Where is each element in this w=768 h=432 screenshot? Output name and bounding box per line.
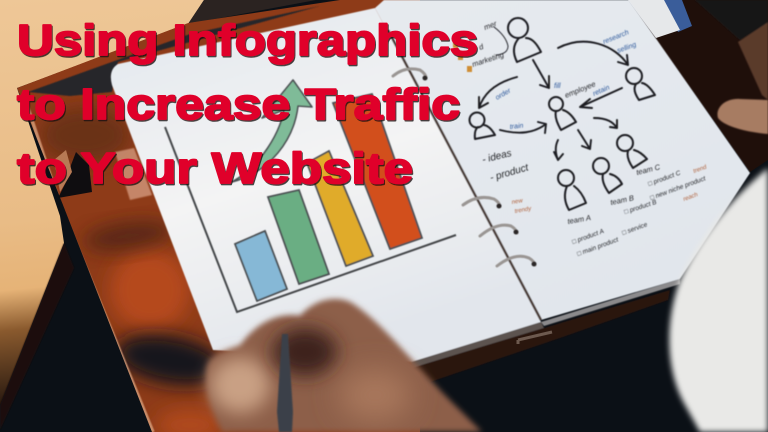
stitching edge of the leather: [24, 96, 153, 432]
person: team C: [617, 135, 647, 168]
white paper tab top right: [628, 0, 680, 38]
handwritten notes: employee: [563, 79, 597, 100]
handwritten notes: marketing: [471, 50, 506, 69]
green growth arrow: [232, 80, 312, 182]
binder spine: [388, 30, 541, 320]
person: team A: [558, 170, 586, 210]
folder lower edge: [412, 290, 670, 382]
blurred white sleeve: [669, 168, 768, 432]
binder rings: [393, 69, 536, 266]
wooden table: [0, 0, 204, 405]
green bar: [268, 190, 329, 284]
right side dark leather: [628, 0, 768, 172]
bright leather patch: [110, 250, 190, 330]
org chart sketch: [453, 18, 708, 258]
handwritten notes: reach: [683, 192, 699, 203]
person: employee: [549, 97, 576, 130]
handwritten notes: research: [602, 29, 630, 46]
title: [17, 16, 478, 193]
handwritten notes: □ main product: [576, 236, 621, 258]
table shadow strip: [0, 243, 74, 430]
leather tab notch: [58, 152, 92, 198]
pages of the open binder: [111, 0, 750, 382]
person: team B: [593, 158, 622, 193]
blue notebook tab: [662, 0, 692, 32]
handwritten notes: □ service: [621, 221, 649, 237]
dark top shade on leather: [81, 216, 175, 256]
page stack edge: [541, 279, 680, 326]
pen: [277, 334, 293, 432]
handwritten notes: [453, 19, 708, 258]
handwritten notes: □ product C: [647, 170, 682, 188]
handwritten notes: team A: [567, 213, 591, 226]
leather cover: [17, 0, 420, 432]
title line 2: to Increase Traffic: [17, 80, 460, 129]
handwritten notes: □ product A: [571, 228, 605, 246]
handwritten notes: □ new niche product: [649, 175, 708, 202]
person: left: [470, 112, 495, 139]
light lower fingers: [210, 357, 270, 413]
yellow bar: [307, 151, 373, 266]
handwritten notes: order: [494, 87, 513, 102]
dark top area behind the folder: [188, 0, 768, 110]
person: top manager: [508, 18, 541, 62]
handwritten notes: trend: [693, 164, 708, 175]
writing hand with pen: [206, 299, 482, 432]
brown upper leather shade: [40, 107, 130, 163]
bar chart sketch: [165, 80, 456, 312]
dark inner pocket of the folder: [28, 6, 320, 96]
folder clasp: [518, 332, 552, 344]
top right dark corner: [695, 0, 768, 40]
handwritten notes: new: [511, 198, 524, 206]
arrows between people: [479, 42, 628, 160]
handwritten notes: train: [509, 123, 524, 131]
handwritten notes: mer: [483, 19, 498, 32]
finger shadow: [273, 328, 337, 376]
handwritten notes: selling: [616, 41, 637, 55]
red bar: [333, 94, 422, 249]
handwritten notes: team C: [635, 162, 662, 177]
handwritten notes: - product: [489, 162, 531, 184]
lower leather glow: [156, 409, 224, 432]
handwritten notes: - ideas: [481, 148, 513, 166]
blue bar: [235, 231, 287, 301]
back of hand highlight: [339, 369, 411, 421]
dark shadow band across the leather: [112, 327, 228, 393]
handwritten notes: d: [478, 42, 485, 52]
handwritten notes: □ product B: [623, 199, 658, 216]
leather folder: [17, 0, 420, 432]
person: right: [626, 68, 655, 100]
finger at right edge: [717, 99, 768, 134]
pale light patch on leather: [115, 148, 152, 200]
left page: [111, 8, 541, 362]
title line 3: to Your Website: [17, 144, 413, 193]
right page: [375, 0, 750, 320]
hand shape: [206, 299, 482, 432]
handwritten notes: fill: [554, 83, 561, 90]
chart axes: [165, 127, 456, 312]
handwritten notes: team B: [610, 193, 635, 207]
textured sleeve top right: [738, 22, 768, 100]
handwritten notes: retain: [592, 84, 611, 98]
handwritten notes: trendy: [514, 206, 533, 215]
title line 1: Using Infographics: [17, 16, 478, 65]
